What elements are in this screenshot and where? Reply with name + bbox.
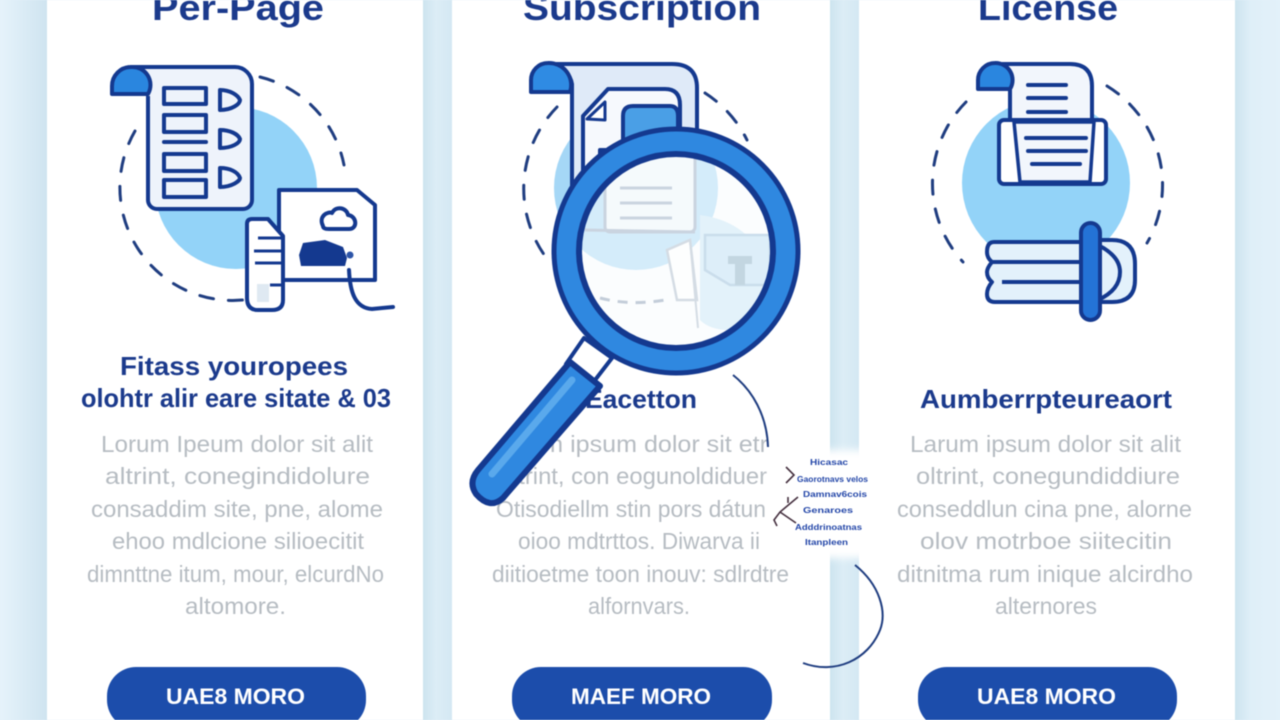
subheading: per-page: Fitass youropees xyxy=(120,351,348,381)
panel: per-page xyxy=(47,0,423,720)
text block: subscription body xyxy=(492,431,789,619)
text block: per-page body: Lorum Ipeum dolor sit alit xyxy=(101,431,374,457)
text block: license body: olov motrboe siitecitin xyxy=(920,528,1172,554)
button: license xyxy=(918,667,1177,720)
sticky note callout xyxy=(770,450,878,558)
curved connector: top xyxy=(733,375,768,447)
text block: license body: Larum ipsum dolor sit alit xyxy=(910,431,1182,457)
text block: subscription body: diitioetme toon inouv: sdlrdtre xyxy=(492,561,789,587)
text block: license body: conseddlun cina pne, alorne xyxy=(897,496,1192,522)
text block: subscription body: oioo mdtrttos. Diwarva ii xyxy=(518,528,760,554)
text block: license body: alternores xyxy=(995,593,1097,619)
button: subscription: MAEF MORO xyxy=(571,684,711,709)
text block: per-page body: altomore. xyxy=(185,593,286,619)
text block: subscription body: Otisodiellm stin pors dátun xyxy=(496,496,766,522)
text block: per-page body: dimnttne itum, mour, elcurdNo xyxy=(87,561,384,587)
text block: per-page body: consaddim site, pne, alome xyxy=(91,496,383,522)
button: license: UAE8 MORO xyxy=(977,684,1116,709)
subheading: per-page: olohtr alir eare sitate & 03 xyxy=(81,383,391,413)
text block: per-page body: altrint, conegindidolure xyxy=(105,463,370,489)
icon: magnifying glass xyxy=(472,106,798,503)
text block: subscription body: alfornvars. xyxy=(588,593,690,619)
text block: subscription body: Lorm ipsum dolor sit etr xyxy=(506,431,768,457)
curved connector: bottom xyxy=(803,565,883,667)
button: per-page: UAE8 MORO xyxy=(166,684,305,709)
text block: subscription body: atrint, con eogunoldiduer xyxy=(505,463,767,489)
text block: license body: oltrint, conegundiddiure xyxy=(916,463,1180,489)
icon: per-page illustration xyxy=(112,67,393,310)
sticky note callout: Damnav6cois xyxy=(803,489,867,499)
sticky note callout: Hicasac xyxy=(810,457,848,467)
panel: license xyxy=(859,0,1235,720)
sticky note callout: Adddrinoatnas xyxy=(795,522,862,532)
subheading: per-page xyxy=(81,351,391,413)
text block: license body xyxy=(897,431,1193,619)
button: per-page xyxy=(107,667,366,720)
text block: license body: ditnitma rum inique alcirdho xyxy=(897,561,1193,587)
sticky note callout: Itanpleen xyxy=(805,537,848,547)
lens contents xyxy=(582,158,770,330)
button: subscription xyxy=(512,667,772,720)
panel: subscription xyxy=(452,0,830,720)
text block: per-page body: ehoo mdlcione silioecitit xyxy=(112,528,365,554)
sticky note callout: Genaroes xyxy=(803,505,853,515)
subheading: subscription: Eacetton xyxy=(585,384,697,414)
sticky note callout: Gaorotnavs velos xyxy=(797,474,868,484)
text block: per-page body xyxy=(87,431,384,619)
icon: license illustration xyxy=(932,63,1163,320)
subheading: license: Aumberrpteureaort xyxy=(920,384,1172,414)
icon: subscription illustration xyxy=(524,63,747,270)
